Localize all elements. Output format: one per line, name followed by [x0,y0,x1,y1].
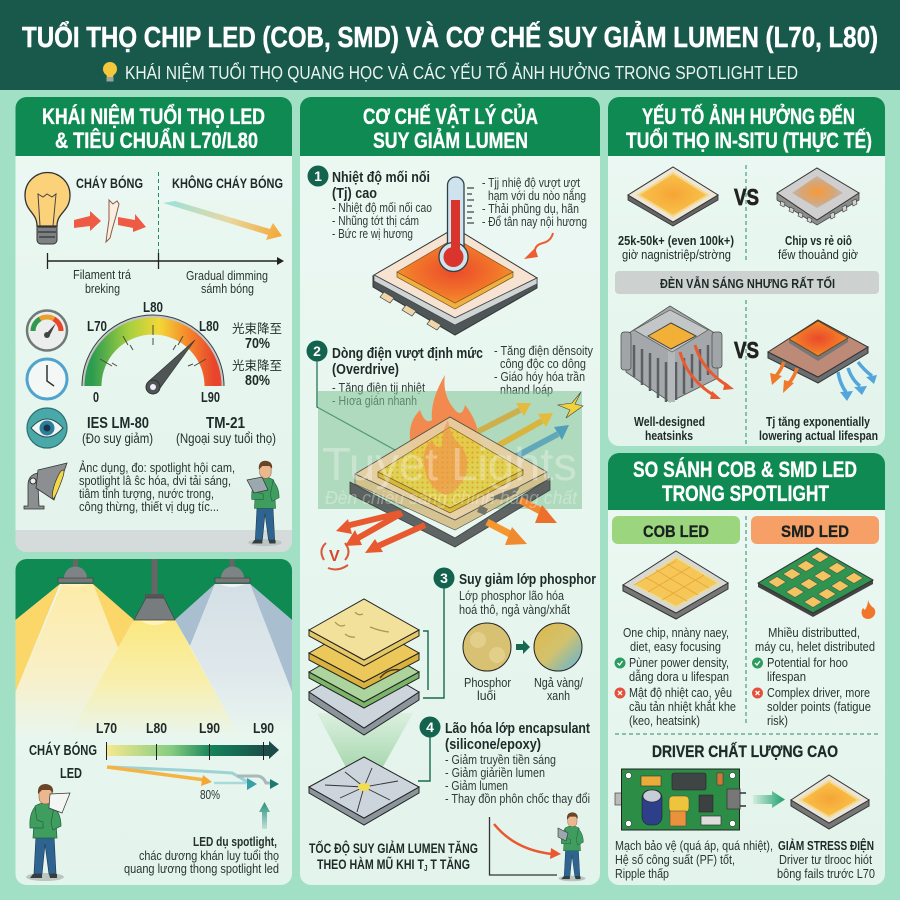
mechanism 1 side notes: hạm với du nòo nắng [488,188,586,203]
standards labels: (Đo suy giảm) [82,431,153,446]
floor [16,530,292,552]
panel: physical mechanisms [300,97,600,885]
panel: in-situ factors [608,97,885,446]
flux labels: 70% [245,336,270,352]
mechanism 2 text: - Tăng điện tịj nhiệt [332,381,425,395]
phosphor before [463,623,512,703]
note text: LED dụ spotlight, [193,834,277,849]
smd description: Mhiều distributted, [768,625,860,640]
mechanism 2 side notes: - Giáo hóy hóa trần [494,370,585,384]
panel heading: TRONG SPOTLIGHT [662,481,829,506]
stress reduction text: Driver tư tlrooc hiót [779,852,872,867]
mechanism 3 text: Lớp phosphor lão hóa [459,589,564,603]
cob pros and cons [614,655,736,728]
phosphor before: luối [477,688,496,703]
flux labels: 80% [245,373,270,389]
overheated chip [350,417,550,547]
smd pros and cons [752,655,871,728]
cheap chip [777,168,859,225]
stress reduction text: bông fails trước L70 [777,866,875,881]
icon: thermometer [439,177,474,272]
icon: light bulb [25,172,70,244]
voltage symbol: V [329,548,340,565]
vs label bottom: VS [734,337,759,363]
timeline labels [73,267,268,296]
driver heading: DRIVER CHẤT LƯỢNG CAO [652,742,838,761]
gauge labels: L70 [87,319,107,335]
hot chip [373,228,537,335]
mechanism 4 text: Lão hóa lớp encapsulant [445,721,590,737]
mechanism 4 text: - Giảm truyền tiền sáng [445,753,556,767]
vs label top: VS [734,184,759,210]
up arrow [259,802,270,829]
conclusion text: J [424,864,427,873]
heatsink [621,306,734,402]
mechanism 1 side notes [482,176,587,229]
mechanism 1 text: - Nhiệt độ mối nối cao [332,201,432,215]
bottom labels [634,414,878,443]
panel: cob vs smd [608,453,885,885]
rear arrows [477,403,569,458]
voltage symbol [321,543,348,569]
bottom labels: Tj tăng exponentially [766,414,871,429]
mechanism 2 text: - Hıơa gián nhanh [332,394,417,408]
grey banner [615,271,879,294]
bottom labels: heatsinks [645,428,693,443]
watermark text: Tuyet Lights [322,438,577,490]
icon: clock [27,359,67,399]
cob pros and cons: Mật độ nhiệt cao, yêu [629,685,732,700]
stress reduction text: GIẢM STRESS ĐIỆN [778,838,874,853]
mechanism 2 side notes: công độc co dông [500,357,586,371]
timeline labels: L70 [96,721,117,737]
output chip [791,775,869,829]
mechanism 1 text [332,170,432,241]
overheating chip on board [768,320,877,401]
mechanism 2 side notes: - Tăng điện děnsoity [494,344,594,358]
flux labels: 光束降至 [232,322,282,336]
gauge labels: L80 [199,319,219,335]
icon: eye [27,408,67,448]
connector 3 [423,588,444,698]
icon: broken filament with arrows [74,200,146,242]
chip labels: fếw thouảnd giờ [778,247,858,262]
flux labels [232,322,282,389]
smd pros and cons: Complex driver, more [767,685,870,700]
timeline labels: sámh bóng [201,281,254,296]
person with tablet [247,461,282,546]
panel: spotlights and timeline [16,559,292,885]
cob tag: COB LED [643,522,709,541]
note text: quang lương thong spotlight led [124,861,279,876]
timeline labels: Filament trá [73,267,132,282]
stress reduction text [777,838,875,881]
standards labels: (Ngoại suy tuổi thọ) [176,431,276,446]
timeline labels: LED [60,766,82,782]
badge 1 [308,166,328,186]
smd pros and cons: risk) [767,713,788,728]
mechanism 4 text: - Giảm giảriền lumen [445,766,545,780]
lamp right [215,559,250,587]
timeline labels [29,721,274,782]
cob description [623,625,729,654]
cob description: diet, easy focusing [630,639,721,654]
mechanism 3 text [459,572,596,617]
gauge labels [87,300,220,406]
person reading [558,812,585,881]
mechanism 2 text [332,346,483,408]
flux labels: 光束降至 [232,359,282,373]
panel heading: CƠ CHẾ VẬT LÝ CỦA [363,104,538,129]
mechanism 2 text: Dòng điện vượt định mức [332,346,483,362]
driver board [615,769,746,830]
icon: flame [862,600,875,619]
mechanism 4 text: - Giảm lumen [445,779,508,793]
badge 2: 2 [313,343,321,359]
timeline labels: Gradual dimming [186,268,268,283]
flame overlay on chip [424,420,467,495]
conclusion text: TỐC ĐỘ SUY GIẢM LUMEN TĂNG [309,841,478,856]
panel heading: SUY GIẢM LUMEN [373,128,528,153]
layer stack [309,599,419,735]
application text: Ảnc dụng, đo: spotlight hội cam, [79,460,235,475]
cob pros and cons: (keo, heatsink) [629,713,700,728]
mechanism 4 text: (silicone/epoxy) [445,737,541,753]
ceiling [16,559,292,620]
application text: tiâm tỉnh tượng, nước trong, [79,486,214,501]
cob chip [623,551,728,619]
decay chart [490,817,561,875]
driver description: Hệ số công suất (PF) tốt, [615,852,735,867]
chip labels: 25k-50k+ (even 100k+) [618,233,734,248]
timeline labels: L80 [146,721,167,737]
driver description: Mạch bảo vệ (quá áp, quá nhiệt), [615,838,773,853]
heat arrows bottom [336,513,425,553]
heat arrows right [487,500,557,545]
cob pros and cons: dẫng dora u lifespan [629,669,729,684]
subtitle: KHÁI NIỆM TUỔI THỌ QUANG HỌC VÀ CÁC YẾU TỐ ẢNH HƯỞNG TRONG SPOTLIGHT LED [125,62,798,83]
panel heading [608,453,885,510]
application text: spotlight lâ ŝc hóa, dvi tải sáng, [79,473,231,488]
note text [124,834,279,876]
phosphor after: xanh [547,688,570,703]
icon: spotlight lamp [24,463,67,509]
standards labels: IES LM-80 [87,415,149,432]
mechanism 2 side notes: nhand loáp [500,383,553,397]
badge 4: 4 [426,719,434,735]
header band [0,0,900,90]
person with checklist [26,784,70,881]
timeline labels: L90 [199,721,220,737]
chip labels: Chip vs rẻ oiô [785,233,852,248]
badge 3: 3 [440,570,448,586]
lumen timeline bar [106,741,279,760]
panel: led lifetime concept [16,97,292,552]
gauge chart [85,300,221,406]
smd tag: SMD LED [781,522,849,541]
mechanism 4 text [445,721,590,806]
mechanism 1 text: Nhiệt độ mối nối [332,170,430,186]
standards labels: TM-21 [206,415,245,432]
badge 3 [434,568,454,588]
cob description: One chip, nnàny naey, [623,625,729,640]
cob pros and cons: cầu tản nhiệt khắt khe [629,699,736,714]
timeline labels: breking [85,281,120,296]
gauge labels: L80 [143,300,163,316]
cob tag [612,516,740,544]
subtitle bulb icon [103,62,117,82]
bottom labels: Well-designed [634,414,705,429]
mechanism 2 text: (Overdrive) [332,362,399,378]
badge 1: 1 [314,168,322,184]
grey banner: ĐÈN VẪN SÁNG NHƯNG RẤT TỐI [660,276,835,291]
smd description: máy cu, helet distributed [755,639,875,654]
driver description [615,838,773,881]
conclusion text [309,841,478,873]
connector 4 [418,737,430,781]
panel heading: & TIÊU CHUẨN L70/L80 [55,128,258,153]
phosphor arrow [516,640,530,654]
connector 2 [317,361,395,450]
smd board [758,548,873,617]
smd tag [751,516,879,544]
icon: small gauge [27,310,67,350]
smd description [755,625,875,654]
mechanism 2 side notes [494,344,594,397]
cob pros and cons: Pùner power density, [629,655,729,670]
conclusion text: THEO HÀM MŨ KHI T [317,857,453,872]
mechanism 3 text: Suy giảm lớp phosphor [459,572,596,588]
badge 2 [306,340,328,362]
phosphor after: Ngả vàng/ [534,675,583,690]
smd pros and cons: solder points (fatigue [767,699,871,714]
dimming arrow [163,201,282,240]
lamp left [58,559,93,587]
chip labels: giờ nagnistriệp/strờng [622,247,731,262]
gauge labels: 0 [93,390,99,406]
conclusion text: T TĂNG [427,857,470,872]
label: no burnout: KHÔNG CHÁY BÓNG [172,174,283,191]
panel heading: KHÁI NIỆM TUỔI THỌ LED [42,104,265,129]
mechanism 1 side notes: - Đổ tân nay nội hương [482,215,587,229]
light cone [317,713,413,790]
cracked plate [309,757,419,825]
lamp centre [134,559,175,625]
phosphor after [534,623,583,703]
timeline [47,253,284,269]
mechanism 1 text: (Tj) cao [332,186,377,202]
note text: chác dương khán luy tuổi thọ [139,848,279,863]
wavy heat arrow [524,233,553,259]
badge 4 [420,716,440,738]
mechanism 1 text: - Bức re wị hương [332,227,413,241]
80 percent label: 80% [200,787,220,802]
decay arrows [107,767,279,790]
timeline labels: L90 [253,721,274,737]
panel heading [16,97,292,156]
timeline labels: CHÁY BÓNG [29,741,97,759]
panel heading [608,97,885,156]
standards labels [82,415,276,446]
application text: công thừng, thiết vị dụg tíc... [79,499,219,514]
watermark plate [318,391,582,509]
overdrive flame [410,375,482,490]
driver description: Ripple thấp [615,866,669,881]
label: burnout: CHÁY BÓNG [76,174,143,191]
good chip [628,167,718,226]
icon: lightning bolt [558,392,583,418]
mechanism 1 side notes: - Thải phũng dụ, hãn [482,202,579,216]
chip labels [618,233,858,262]
smd pros and cons: lifespan [767,669,806,684]
light beams [16,584,292,737]
arrow to chip [753,791,785,808]
panel heading [300,97,600,156]
mechanism 3 text: hoá thô, ngả vàng/xhất [459,603,570,617]
gauge labels: L90 [201,390,220,406]
watermark text: Đèn chiếu sáng chính hãng chất [325,488,578,508]
smd pros and cons: Potential for hoo [767,655,848,670]
mechanism 1 text: - Nhũng tớt thị cám [332,214,419,228]
phosphor before: Phosphor [464,675,512,690]
mechanism 1 side notes: - Tjj nhiệ độ vượt ượt [482,176,580,190]
mechanism 4 text: - Thay đồn phôn chốc thay đổi [445,792,590,806]
application text [79,460,235,514]
